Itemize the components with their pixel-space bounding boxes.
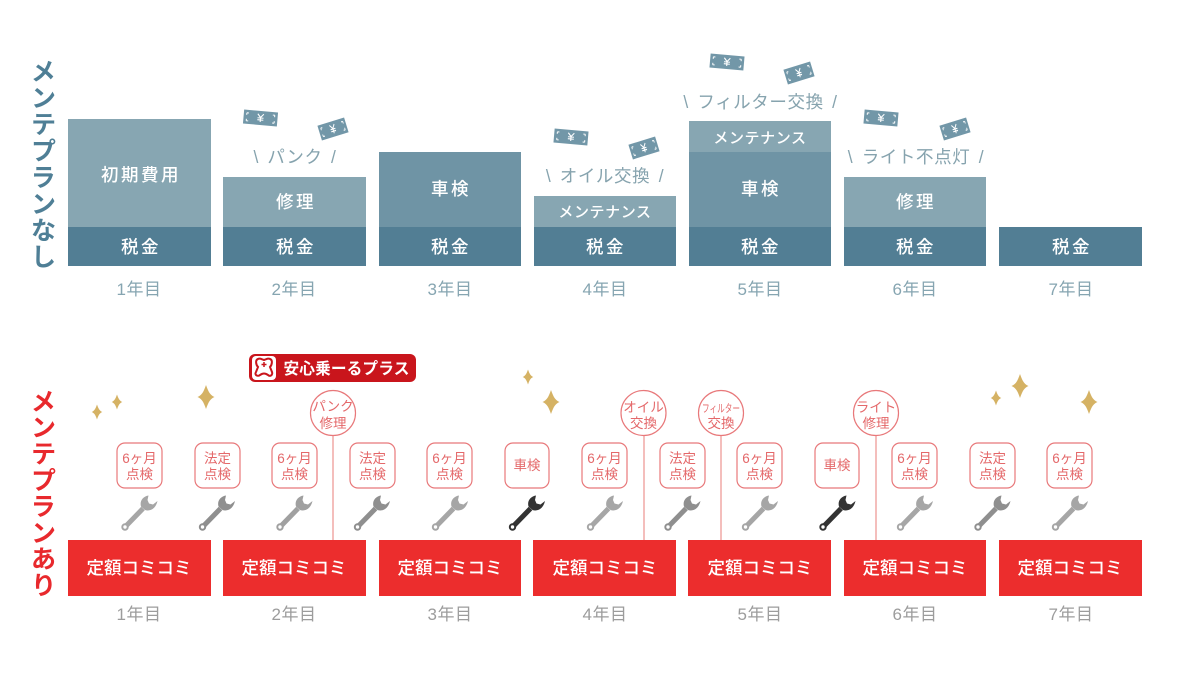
year labels: with plan: 2年目 (272, 605, 316, 624)
callout: フィルター交換: 交換 (708, 416, 735, 431)
year 6 bar (844, 177, 986, 266)
year 1 bar (68, 119, 211, 266)
year labels: with plan: 6年目 (893, 605, 937, 624)
year 3 bar: 税金 (431, 237, 471, 257)
year 5 bar: 税金 (741, 237, 781, 257)
year 6 bar: 修理 (896, 192, 936, 212)
inspection badges: 点検 (359, 467, 386, 482)
annotation: ライト不点灯: \ ライト不点灯 / (848, 147, 984, 167)
inspection badges: 点検 (746, 467, 774, 482)
panel: with plan fixed-price bars: 定額コミコミ (708, 558, 812, 578)
inspection badges: 6ヶ月 (587, 451, 622, 466)
year 6 bar: 税金 (896, 237, 936, 257)
year labels: without plan: 7年目 (1049, 280, 1093, 299)
inspection badges: 点検 (669, 467, 696, 482)
year 2 bar (223, 177, 366, 266)
inspection badges: 法定 (669, 451, 696, 466)
panel: without plan bar chart (68, 119, 1142, 266)
year 5 bar: 車検 (741, 179, 781, 199)
callout: フィルター交換: フィルター (702, 402, 740, 415)
panel: with plan fixed-price bars: 定額コミコミ (398, 558, 502, 578)
inspection badges: 6ヶ月 (1052, 451, 1087, 466)
year 2 bar: 税金 (276, 237, 316, 257)
year labels: with plan: 5年目 (738, 605, 782, 624)
inspection badges: 点検 (281, 467, 308, 482)
panel: with plan fixed-price bars: 定額コミコミ (1018, 558, 1122, 578)
year labels: without plan: 5年目 (738, 280, 782, 299)
callout: オイル交換: オイル (623, 400, 664, 415)
inspection badges: 点検 (979, 467, 1006, 482)
panel: with plan fixed-price bars: 定額コミコミ (86, 558, 192, 578)
year 2 bar: 修理 (276, 192, 316, 212)
inspection badges: 車検 (824, 458, 851, 473)
annotation: パンク: \ パンク / (253, 147, 337, 167)
icon: sparkles (92, 370, 1098, 419)
inspection badges: 法定 (979, 451, 1006, 466)
callout: フィルター交換 (698, 390, 744, 436)
year labels: with plan: 4年目 (583, 605, 627, 624)
callout: 安心乗ーるプラス (249, 354, 416, 382)
year 3 bar: 車検 (431, 179, 471, 199)
year 5 bar: メンテナンス (713, 130, 807, 147)
inspection badges: 点検 (436, 467, 463, 482)
inspection badges: 法定 (359, 451, 386, 466)
year labels: without plan: 6年目 (893, 280, 937, 299)
year labels: without plan: 2年目 (272, 280, 316, 299)
year 5 bar (689, 121, 831, 266)
inspection badges: 6ヶ月 (432, 451, 467, 466)
callout: ライト修理: 修理 (862, 416, 890, 431)
inspection badges: 法定 (204, 451, 231, 466)
callout: パンク修理: パンク (312, 399, 354, 414)
panel: with plan fixed-price bars: 定額コミコミ (552, 558, 658, 578)
inspection badges: 6ヶ月 (897, 451, 932, 466)
year labels: without plan (117, 280, 1093, 299)
year 4 bar: 税金 (586, 237, 626, 257)
annotation: フィルター交換: \ フィルター交換 / (683, 92, 838, 112)
inspection badges: 点検 (204, 467, 231, 482)
inspection badges: 点検 (591, 467, 618, 482)
year labels: without plan: 4年目 (583, 280, 627, 299)
year labels: with plan: 7年目 (1049, 605, 1093, 624)
inspection badges: 6ヶ月 (742, 451, 777, 466)
icon: money bills (243, 54, 971, 159)
title: メンテプランなし: メンテプランなし (27, 58, 55, 270)
icon: wrenches (121, 496, 1088, 531)
callout: パンク修理 (310, 390, 356, 436)
panel: with plan fixed-price bars: 定額コミコミ (862, 558, 968, 578)
annotation: オイル交換: \ オイル交換 / (546, 166, 664, 186)
inspection badges: 点検 (901, 467, 928, 482)
year 3 bar (379, 152, 521, 266)
panel: with plan fixed-price bars: 定額コミコミ (242, 558, 346, 578)
year 4 bar (534, 196, 676, 266)
callout: オイル交換 (621, 390, 666, 436)
year labels: without plan: 3年目 (428, 280, 472, 299)
inspection badges: 車検 (514, 458, 541, 473)
panel: with plan fixed-price bars (68, 540, 1142, 596)
inspection badges: 6ヶ月 (122, 451, 157, 466)
callout: ライト修理: ライト (856, 400, 896, 415)
inspection badges: 点検 (126, 467, 153, 482)
callout: パンク修理: 修理 (320, 416, 347, 431)
repair callout lines (333, 435, 876, 540)
year 7 bar: 税金 (1052, 237, 1092, 257)
year 7 bar (999, 227, 1142, 266)
title: メンテプランあり: メンテプランあり (27, 388, 55, 598)
callout: ライト修理 (854, 390, 898, 436)
year 1 bar: 税金 (121, 237, 161, 257)
year labels: with plan: 3年目 (428, 605, 472, 624)
year labels: without plan: 1年目 (117, 280, 161, 299)
inspection badges (117, 443, 1092, 488)
callout: 安心乗ーるプラス: 安心乗ーるプラス (284, 359, 410, 378)
inspection badges: 6ヶ月 (277, 451, 312, 466)
callout: オイル交換: 交換 (630, 416, 658, 431)
year 4 bar: メンテナンス (558, 204, 652, 221)
inspection badges: 点検 (1056, 467, 1084, 482)
year 1 bar: 初期費用 (101, 165, 181, 185)
year labels: with plan: 1年目 (117, 605, 161, 624)
year labels: with plan (117, 605, 1093, 624)
